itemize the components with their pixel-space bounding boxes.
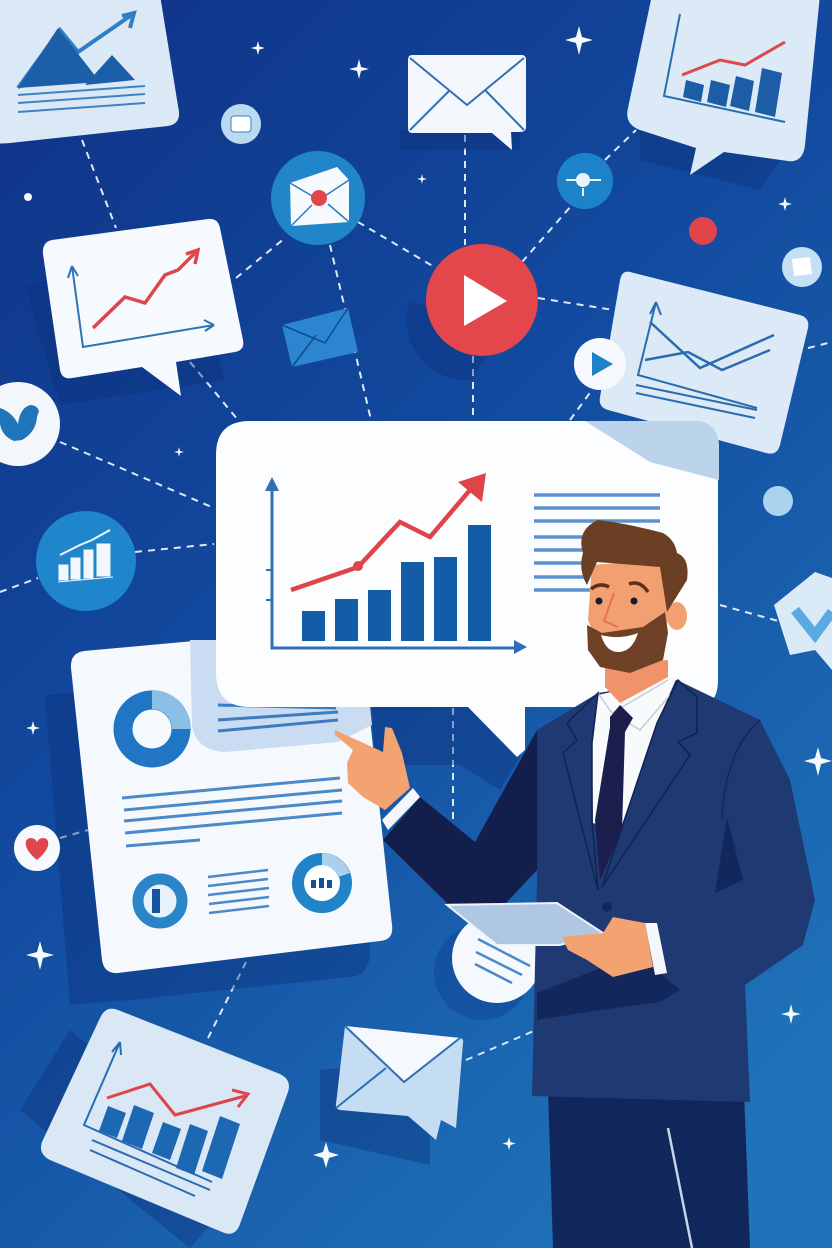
left lapel [563,693,598,890]
report text lines [122,778,342,846]
legs [548,1090,750,1248]
right cuff [645,923,667,975]
twitter badge [0,382,60,466]
small envelope [282,308,358,367]
right check card [774,572,832,670]
heart badge [14,825,60,871]
pointing hand [335,727,410,810]
lower jacket shadow [537,967,680,1020]
text lines [534,495,660,590]
report document [71,640,392,973]
business man [335,520,815,1248]
ear [667,602,687,630]
play badge [574,338,626,390]
mail circle icon [271,151,365,245]
sleeve fold [715,817,743,893]
hair [581,520,688,612]
tablet [447,903,603,945]
bulb badge [557,153,613,209]
donut chart [123,690,191,758]
top right chart card [627,0,820,175]
translucent bubble overlay [190,640,372,752]
top envelope card [408,55,526,150]
red dot [689,217,717,245]
small document circle [434,913,542,1020]
tie [595,705,633,880]
bottom left chart card [41,1009,289,1234]
button [602,902,612,912]
pointing arm [383,730,537,903]
overlay lines [218,705,338,731]
axes [265,477,527,654]
main chart bubble [216,421,719,757]
jacket [532,680,815,1102]
face [588,560,670,650]
holding hand [562,917,653,977]
red trend arrow [291,473,486,590]
right line chart card [600,272,808,454]
brows [591,583,648,592]
top left chart card [0,0,179,144]
pale blue dot [763,486,793,516]
neck [605,660,668,703]
shirt [592,677,677,833]
small blue badge top [221,104,261,144]
right lapel [602,680,697,887]
chart circle icon [36,511,136,611]
beard [587,612,668,673]
network lines [0,130,832,1060]
smile [601,633,638,652]
small right badge [782,247,822,287]
red play button [426,244,538,356]
line chart card left [43,219,243,396]
small gauge left [138,879,182,923]
bottom envelope card [336,1026,463,1140]
gauge right [298,853,350,907]
pointing cuff [382,788,420,830]
bars [302,525,491,641]
eyes and nose [596,598,602,604]
